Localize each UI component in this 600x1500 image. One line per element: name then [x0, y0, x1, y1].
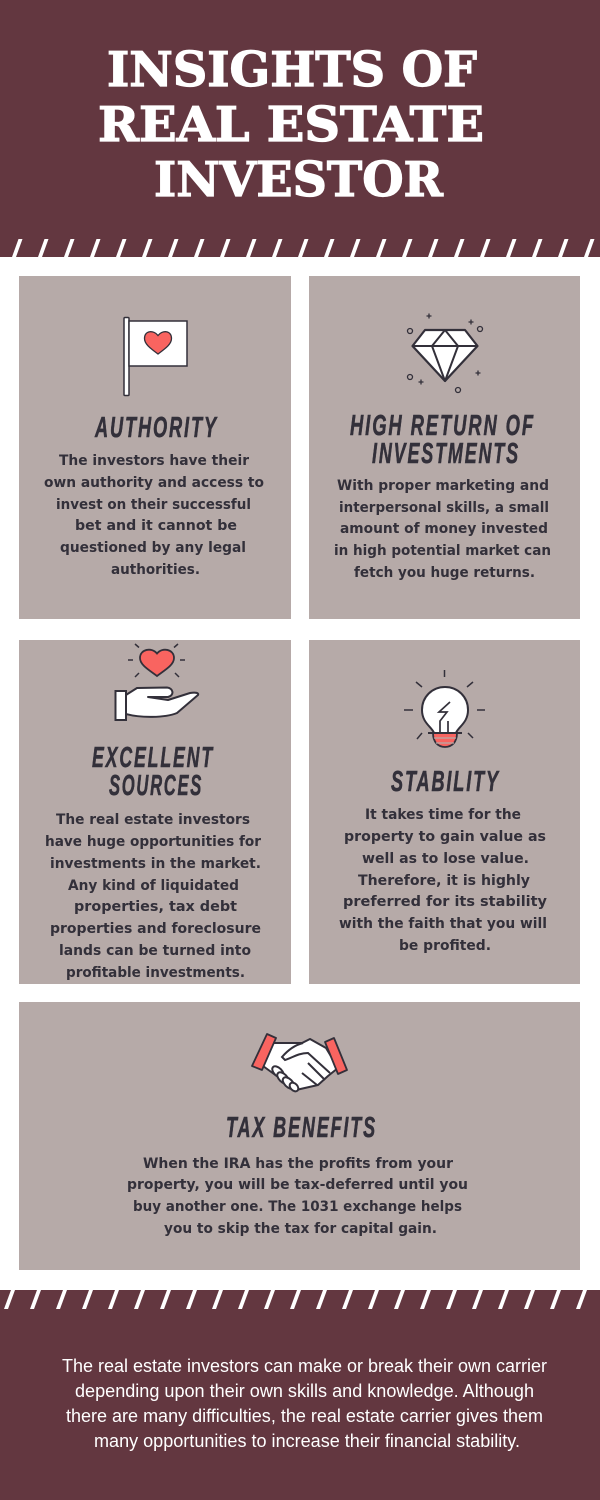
text: excellent sources: have huge opportunities for	[45, 834, 262, 850]
text: stability: be profited.	[399, 938, 491, 954]
text: tax benefits	[127, 1156, 468, 1237]
text: stability: Therefore, it is highly	[358, 873, 531, 889]
text: authority: questioned by any legal	[60, 540, 246, 556]
text: excellent sources: The real estate investors	[56, 812, 250, 828]
icon: flag with heart	[124, 318, 187, 396]
text: stability: preferred for its stability	[343, 894, 548, 910]
title: INSIGHTS OF	[107, 42, 477, 98]
footer text: there are many difficulties, the real estate carrier gives them	[66, 1406, 543, 1426]
icon: light bulb	[404, 670, 485, 747]
text: tax benefits: you to skip the tax for capital gain.	[164, 1221, 437, 1237]
text: tax benefits: buy another one. The 1031 exchange helps	[133, 1199, 462, 1215]
footer text: depending upon their own skills and knowledge. Although	[75, 1381, 534, 1401]
heading: excellent sources: SOURCES	[109, 770, 203, 802]
title: INVESTOR	[154, 152, 444, 208]
heading: high return of investments	[350, 410, 535, 470]
text: stability: property to gain value as	[344, 829, 546, 845]
icon: hand holding heart	[116, 644, 198, 720]
text: authority: The investors have their	[59, 453, 250, 469]
text: excellent sources: investments in the market.	[50, 856, 261, 872]
footer text: The real estate investors can make or break their own carrier	[62, 1356, 547, 1376]
text: stability: with the faith that you will	[339, 916, 547, 932]
icon: diamond	[408, 314, 482, 392]
icon: handshake	[252, 1034, 347, 1093]
text: excellent sources: properties, tax debt	[74, 899, 237, 915]
text: stability: well as to lose value.	[362, 851, 529, 867]
text: high return: in high potential market can	[334, 543, 551, 559]
heading: excellent sources: EXCELLENT	[92, 742, 214, 774]
text: authority: invest on their successful	[56, 497, 251, 513]
title	[98, 42, 484, 208]
panel: high return of investments	[309, 276, 580, 619]
header banner	[0, 0, 600, 257]
title: REAL ESTATE	[98, 97, 484, 153]
text: authority: authorities.	[111, 562, 200, 578]
text: excellent sources: Any kind of liquidated	[68, 878, 239, 894]
text: stability: It takes time for the	[365, 807, 521, 823]
panel: tax benefits	[19, 1002, 580, 1270]
text: high return: With proper marketing and	[337, 478, 549, 494]
text: authority	[44, 453, 264, 578]
text: high return: amount of money invested	[340, 521, 548, 537]
text: excellent sources	[45, 812, 262, 981]
footer text: many opportunities to increase their financial stability.	[94, 1431, 520, 1451]
text: excellent sources: lands can be turned into	[59, 943, 251, 959]
heading: tax benefits: TAX BENEFITS	[226, 1112, 377, 1144]
text: stability	[339, 807, 548, 954]
heading: authority: AUTHORITY	[94, 412, 218, 444]
footer banner	[0, 1290, 600, 1500]
text: high return	[334, 478, 551, 581]
heading: excellent sources	[92, 742, 214, 802]
text: authority: bet and it cannot be	[75, 518, 237, 534]
panel: excellent sources	[19, 640, 291, 984]
text: high return: fetch you huge returns.	[354, 565, 535, 581]
text: tax benefits: property, you will be tax-deferred until you	[127, 1177, 468, 1193]
text: tax benefits: When the IRA has the profits from your	[143, 1156, 454, 1172]
footer text	[62, 1356, 547, 1451]
text: excellent sources: profitable investments.	[66, 965, 245, 981]
panel: authority	[19, 276, 291, 619]
heading: stability: STABILITY	[391, 766, 500, 798]
text: high return: interpersonal skills, a small	[339, 500, 549, 516]
text: authority: own authority and access to	[44, 475, 264, 491]
panel: stability	[309, 640, 580, 984]
text: excellent sources: properties and foreclosure	[50, 921, 261, 937]
